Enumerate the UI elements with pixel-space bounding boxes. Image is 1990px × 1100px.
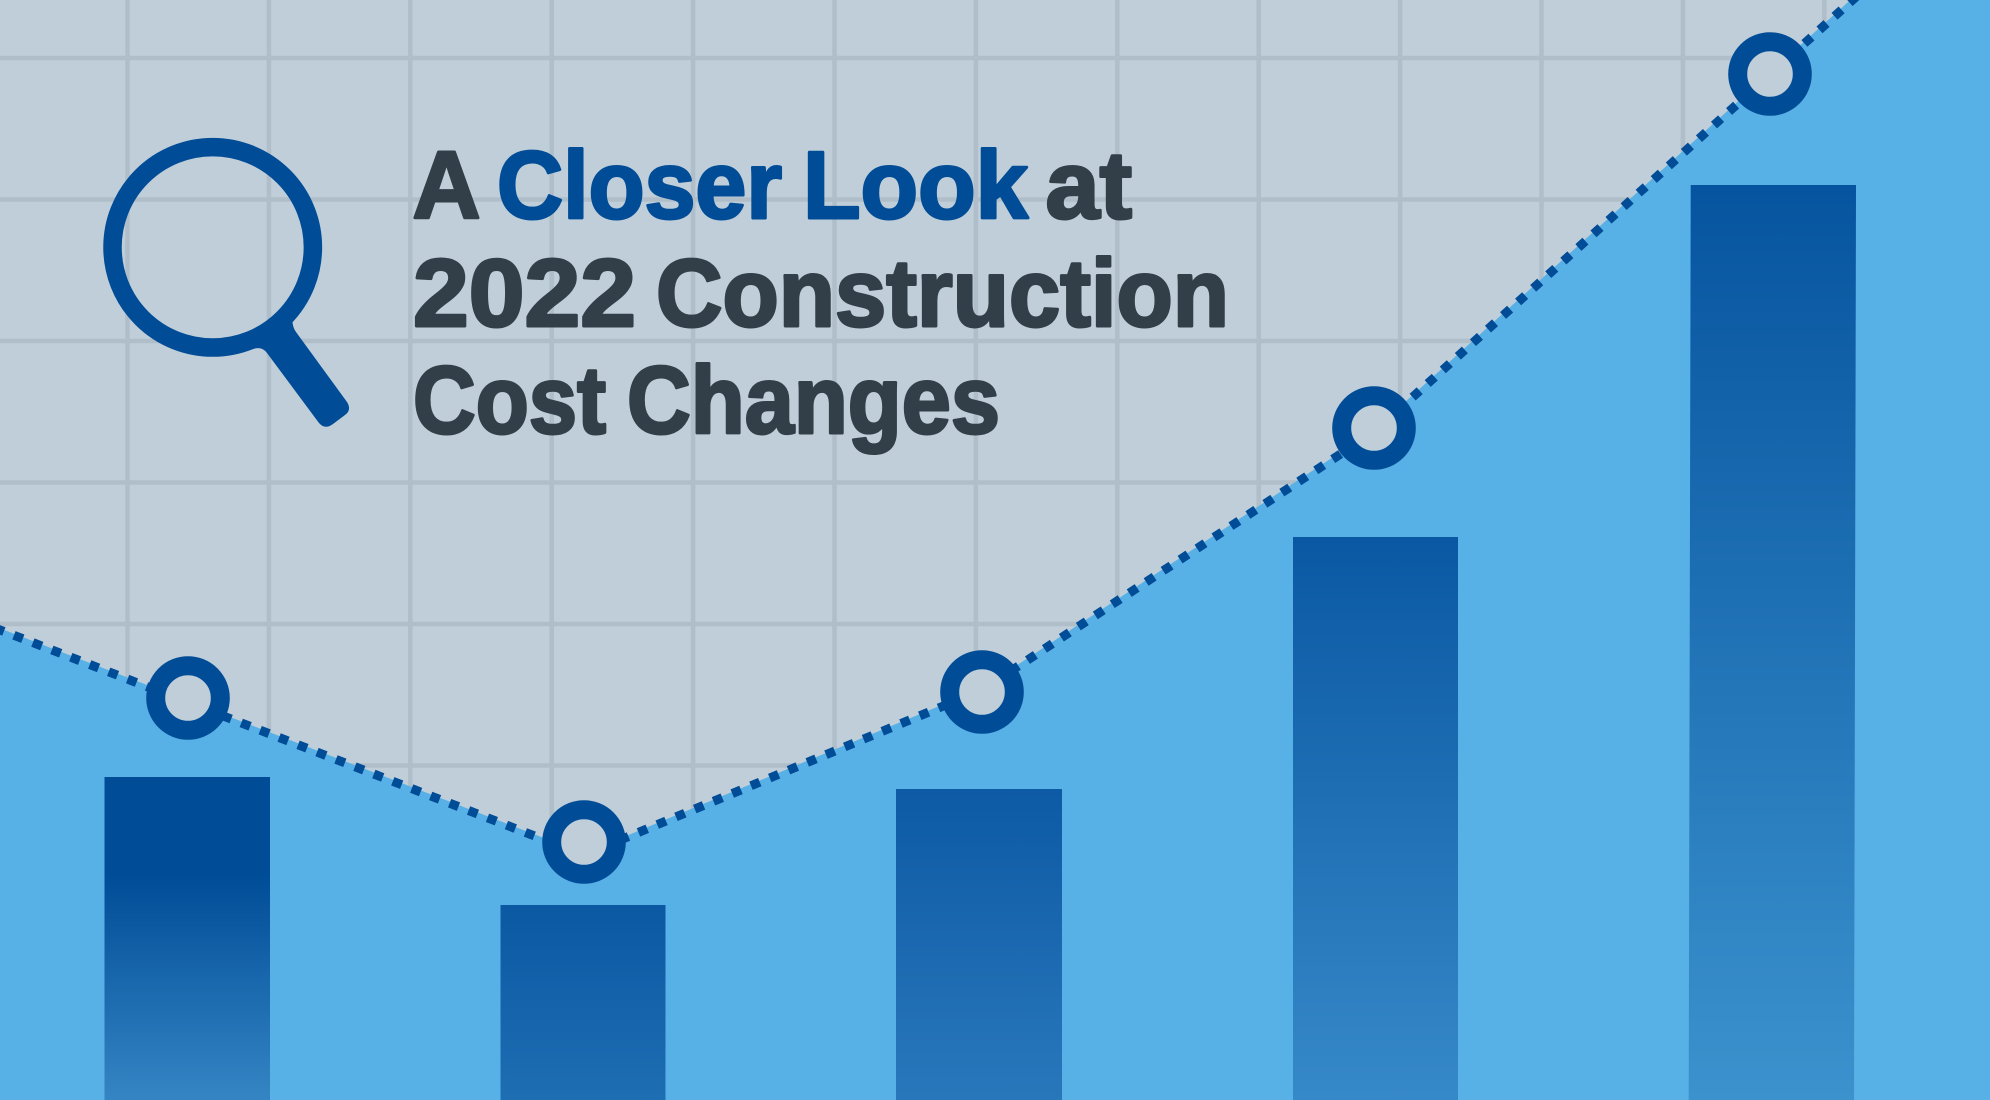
marker 4 [1342, 396, 1406, 460]
marker 5 [1738, 42, 1802, 106]
title line 1: Closer [497, 132, 782, 239]
bar chart [104, 185, 1856, 1100]
icon: magnifying glass [112, 147, 349, 427]
bar 4 [1293, 537, 1458, 1100]
bar 1 [104, 777, 270, 1100]
marker 2 [552, 810, 616, 874]
marker 3 [950, 660, 1014, 724]
title line 1 [412, 132, 1132, 239]
bar 2 [500, 905, 666, 1100]
title [412, 132, 1229, 454]
title line 2: Construction [656, 240, 1229, 347]
title line 1: at [1046, 132, 1132, 239]
bar 5 [1689, 185, 1856, 1100]
dotted trend line [0, 0, 1857, 855]
data point markers [156, 42, 1802, 874]
bar 3 [896, 789, 1062, 1100]
title line 3 [413, 347, 1000, 454]
title line 3: Cost [413, 347, 606, 454]
title line 1: A [412, 132, 480, 239]
title line 2: 2022 [413, 240, 636, 347]
title line 3: Changes [627, 347, 1000, 454]
marker 1 [156, 666, 220, 730]
title line 2 [413, 240, 1229, 347]
title line 1: Look [803, 132, 1029, 239]
